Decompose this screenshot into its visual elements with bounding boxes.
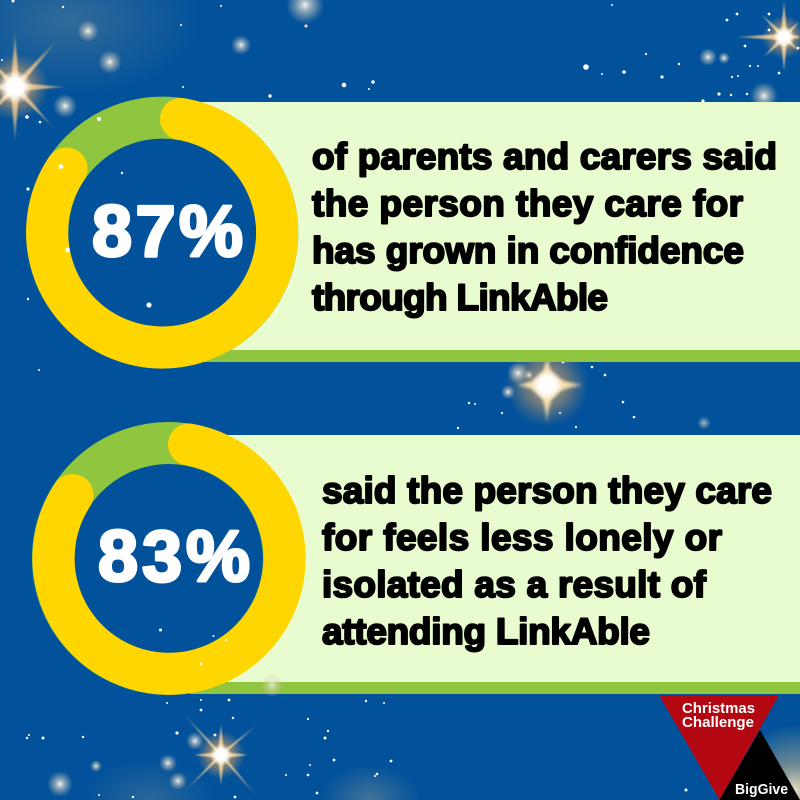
text: stat 2 description: attending LinkAble	[322, 611, 650, 652]
logo: Big Give Christmas Challenge	[659, 695, 800, 800]
text: stat 1 description: of parents and carers said	[312, 136, 777, 177]
glow over stat 2 band	[260, 673, 284, 697]
donut chart: 83%	[53, 443, 285, 674]
text: stat 1 description: the person they care for	[312, 183, 743, 224]
text: stat 2 description: for feels less lonely or	[322, 517, 722, 558]
panel: stat 1 band	[190, 102, 800, 362]
star: top right sparkle	[736, 1, 800, 71]
value: 83%: 83%	[98, 517, 250, 597]
text: stat 2 description	[322, 470, 772, 652]
logo: Big Give Christmas Challenge: Christmas	[682, 701, 755, 717]
panel: stat 2 band	[190, 435, 800, 694]
text: stat 1 description: through LinkAble	[312, 277, 608, 318]
text: stat 1 description	[312, 136, 777, 318]
star: top left sparkle	[0, 27, 69, 143]
text: stat 2 description: said the person they care	[322, 470, 772, 511]
logo: Big Give Christmas Challenge: BigGive	[735, 782, 788, 798]
star: bottom left sparkle	[181, 711, 259, 799]
value: 87%: 87%	[92, 192, 243, 272]
star: central four-point sparkle	[505, 343, 589, 427]
donut chart: 87%	[47, 117, 277, 348]
text: stat 2 description: isolated as a result of	[322, 564, 707, 605]
text: stat 1 description: has grown in confidence	[312, 230, 744, 271]
logo: Big Give Christmas Challenge: Challenge	[682, 715, 754, 731]
